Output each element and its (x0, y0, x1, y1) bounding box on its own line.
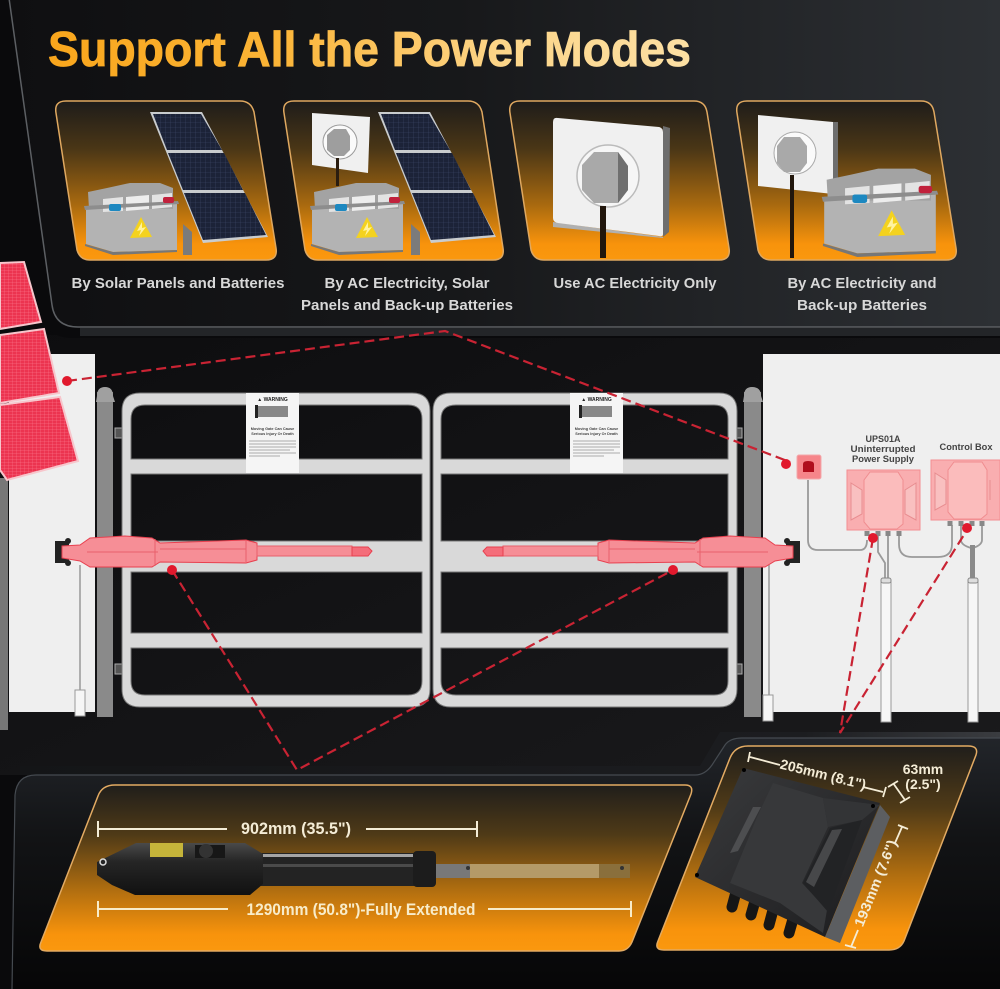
warning sign: right (570, 393, 623, 473)
card: solar panels and batteries (56, 101, 284, 292)
actuator: right (red highlight) (483, 536, 800, 567)
power wiring (808, 480, 982, 579)
label: UPS (850, 434, 916, 465)
dimension: 193mm (845, 825, 908, 948)
label: control box: Control Box (940, 442, 993, 453)
card: AC electricity, solar panels and back-up batteries: Panels and Back-up Batteries (301, 297, 513, 314)
warning sign: left (246, 393, 299, 473)
left gate post (96, 387, 122, 717)
card: AC electricity, solar panels and back-up batteries (284, 101, 513, 314)
dimension: 193mm: 193mm (7.6") (851, 837, 900, 929)
card: AC electricity and back-up batteries: Back-up Batteries (797, 297, 927, 314)
label: UPS: Power Supply (852, 454, 915, 465)
right gate post (735, 387, 763, 717)
card: actuator dimensions (40, 785, 692, 951)
label: UPS: UPS01A (866, 434, 901, 445)
card: control box dimensions (657, 746, 977, 950)
conduit: UPS (881, 578, 891, 722)
caption: Use AC Electricity Only (554, 275, 717, 292)
caption: By AC Electricity, Solar (324, 275, 490, 292)
right wall (763, 354, 1000, 712)
warning sign: right: Serious Injury Or Death (575, 432, 618, 436)
warning sign: right: Moving Gate Can Cause (575, 427, 618, 431)
control box (red highlight) (931, 460, 1000, 526)
gate leaf: left (122, 393, 430, 707)
dimension: 902mm: 902mm (35.5") (241, 819, 351, 838)
dimension: 902mm (98, 819, 477, 838)
caption: By Solar Panels and Batteries (72, 275, 284, 292)
card: AC electricity only (510, 101, 729, 292)
label: UPS: Uninterrupted (850, 444, 916, 455)
dimension: 205mm: 205mm (8.1") (779, 756, 868, 793)
panel: power modes (0, 0, 1000, 338)
wall socket (red highlight) (797, 455, 821, 479)
dimension: 63mm: 63mm (903, 761, 943, 777)
red dashed callout lines (67, 331, 967, 770)
actuator: left (red highlight) (55, 536, 372, 567)
enclosure photo (695, 768, 890, 943)
warning sign: left: ▲ WARNING (257, 397, 288, 403)
actuator photo (97, 843, 630, 895)
solar panel support pole (0, 478, 8, 730)
conduit: control box (968, 578, 978, 722)
warning sign: left: Serious Injury Or Death (251, 432, 294, 436)
dimension: 205mm (748, 752, 886, 797)
dimension: 1290mm (98, 900, 631, 919)
left wall (9, 354, 95, 712)
card: AC electricity and back-up batteries (737, 101, 956, 314)
red solar panel array (0, 262, 78, 480)
red callout dots (62, 376, 972, 575)
dimension: 63mm: (2.5") (905, 776, 941, 792)
left actuator wire and plug (75, 565, 85, 716)
right actuator wire and plug (763, 565, 773, 721)
UPS box (red highlight) (847, 470, 920, 536)
gate leaf: right (433, 393, 737, 707)
dimension: 63mm (888, 761, 943, 803)
middle dark background (0, 335, 1000, 775)
warning sign: right: ▲ WARNING (581, 397, 612, 403)
caption: By AC Electricity and (788, 275, 936, 292)
dimension: 1290mm: 1290mm (50.8")-Fully Extended (246, 900, 476, 919)
warning sign: left: Moving Gate Can Cause (251, 427, 294, 431)
heading: Support All the Power Modes (48, 23, 691, 77)
panel: dimensions (12, 732, 1000, 989)
